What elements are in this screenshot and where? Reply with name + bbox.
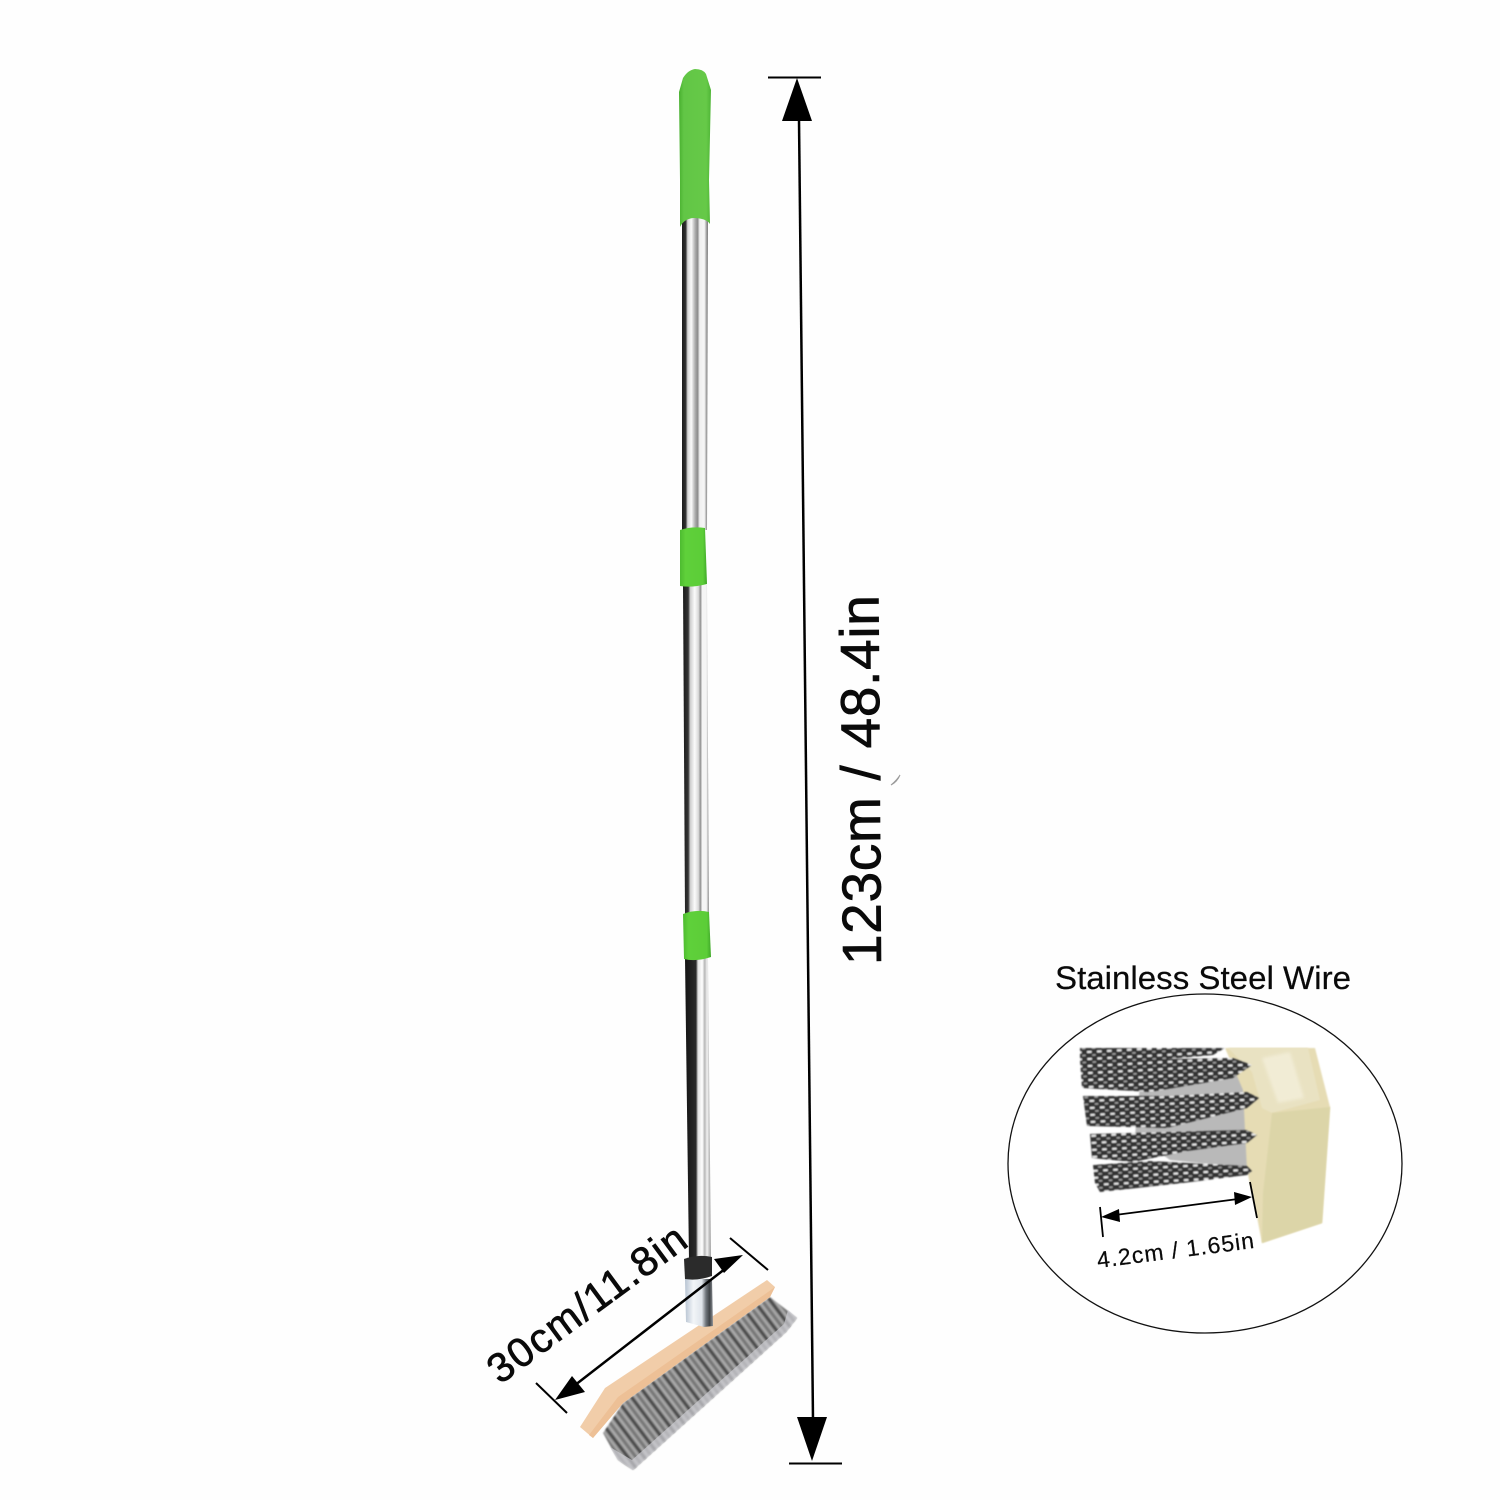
lower green band [683, 911, 711, 960]
brush wooden block [580, 1280, 775, 1438]
green handle grip [679, 69, 711, 227]
lower pole section [685, 958, 711, 1260]
bristle translucent tips [610, 1310, 797, 1470]
block side face [1225, 1048, 1330, 1243]
upper pole section [682, 210, 708, 530]
height label: 123cm / 48.4in [828, 595, 893, 965]
block front face [1262, 1107, 1330, 1243]
upper green band [680, 527, 707, 587]
block highlights [1262, 1052, 1304, 1103]
lower silver socket [685, 1279, 713, 1327]
brush width dimension arrow [536, 1238, 768, 1413]
brush bristles [603, 1297, 797, 1470]
brush width label: 30cm/11.8in [478, 1215, 695, 1392]
wire length label: 4.2cm / 1.65in [1095, 1227, 1255, 1273]
height dimension arrow [768, 78, 842, 1464]
wire brush close-up [1080, 1048, 1330, 1243]
callout circle [1008, 994, 1402, 1333]
gray backing plate [1135, 1072, 1262, 1168]
wire length dimension arrow [1100, 1182, 1257, 1237]
callout heading: Stainless Steel Wire [1055, 960, 1351, 996]
black collar [684, 1256, 712, 1280]
small speck near label [891, 775, 900, 785]
steel wire tufts [1080, 1048, 1259, 1192]
detail callout [1008, 960, 1402, 1333]
middle pole section [683, 585, 709, 915]
broom product photo [580, 69, 797, 1470]
block pale top [1228, 1048, 1320, 1113]
wood block front edge [589, 1287, 775, 1438]
